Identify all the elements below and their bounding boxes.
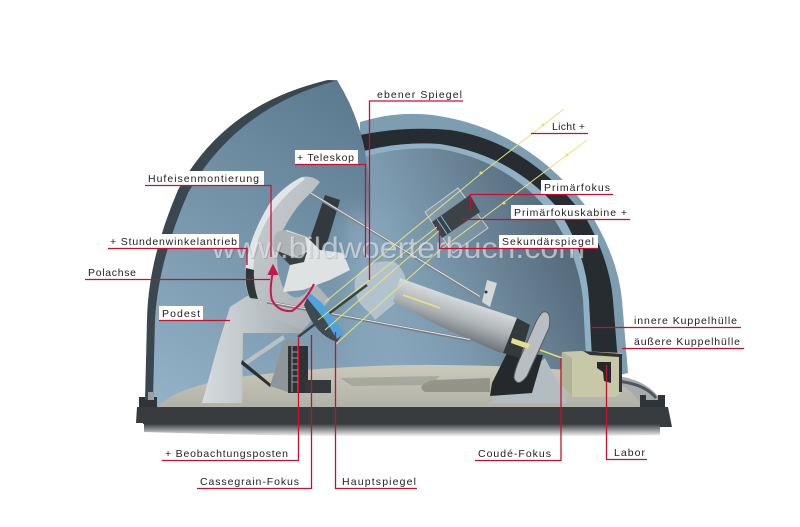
base and floor xyxy=(136,365,672,437)
label: Sekundärspiegel xyxy=(440,224,598,248)
label: Licht xyxy=(531,121,588,134)
label: äußere Kuppelhülle: äußere Kuppelhülle xyxy=(634,336,740,348)
label: Labor xyxy=(606,365,647,460)
podium xyxy=(202,296,303,403)
primary mirror xyxy=(304,293,344,342)
telescope tube xyxy=(267,192,530,358)
label: Labor: Labor xyxy=(614,447,646,459)
label: Podest: Podest xyxy=(162,308,200,320)
label: Hauptspiegel xyxy=(336,332,417,488)
label: Teleskop: + Teleskop xyxy=(297,152,354,164)
laboratory xyxy=(560,351,622,397)
label: Stundenwinkelantrieb xyxy=(108,234,247,265)
label: Primärfokus xyxy=(470,180,613,210)
primary focus cabin xyxy=(425,188,488,253)
polar axis arrows xyxy=(269,266,314,311)
label: Primärfokuskabine: Primärfokuskabine + xyxy=(514,207,627,219)
label: Cassegrain-Fokus: Cassegrain-Fokus xyxy=(200,476,299,488)
watermark: www.bildwoerterbuch.com xyxy=(212,233,586,266)
label: Primärfokus: Primärfokus xyxy=(544,182,610,194)
label: Cassegrain-Fokus xyxy=(197,335,312,488)
label: Coudé-Fokus xyxy=(475,358,561,460)
label: Licht: Licht + xyxy=(552,121,585,133)
label: Hauptspiegel: Hauptspiegel xyxy=(342,476,416,488)
coudé mount xyxy=(490,312,568,403)
label: Hufeisenmontierung xyxy=(145,171,271,257)
label: ebener Spiegel: ebener Spiegel xyxy=(377,89,462,101)
label: ebener Spiegel xyxy=(370,89,463,280)
label: Sekundärspiegel: Sekundärspiegel xyxy=(502,236,594,248)
label: Hufeisenmontierung: Hufeisenmontierung xyxy=(148,173,259,185)
inner dome shell xyxy=(360,114,628,400)
label: Teleskop xyxy=(295,150,366,257)
observatory dome xyxy=(145,80,628,407)
label: Beobachtungsposten: + Beobachtungsposten xyxy=(165,448,288,460)
horseshoe mount xyxy=(245,177,350,330)
label: Stundenwinkelantrieb: + Stundenwinkelantrieb xyxy=(110,236,237,248)
label: Polachse: Polachse xyxy=(88,267,136,279)
label: Primärfokuskabine xyxy=(462,205,630,220)
label: Coudé-Fokus: Coudé-Fokus xyxy=(478,448,551,460)
light rays xyxy=(318,109,587,345)
watermark: www.bildwoerterbuch.com xyxy=(211,232,585,265)
label: Podest xyxy=(159,306,230,320)
observation post xyxy=(288,346,331,393)
label: innere Kuppelhülle: innere Kuppelhülle xyxy=(634,315,737,327)
opened outer shutter xyxy=(145,80,369,407)
label: Beobachtungsposten xyxy=(162,338,298,460)
